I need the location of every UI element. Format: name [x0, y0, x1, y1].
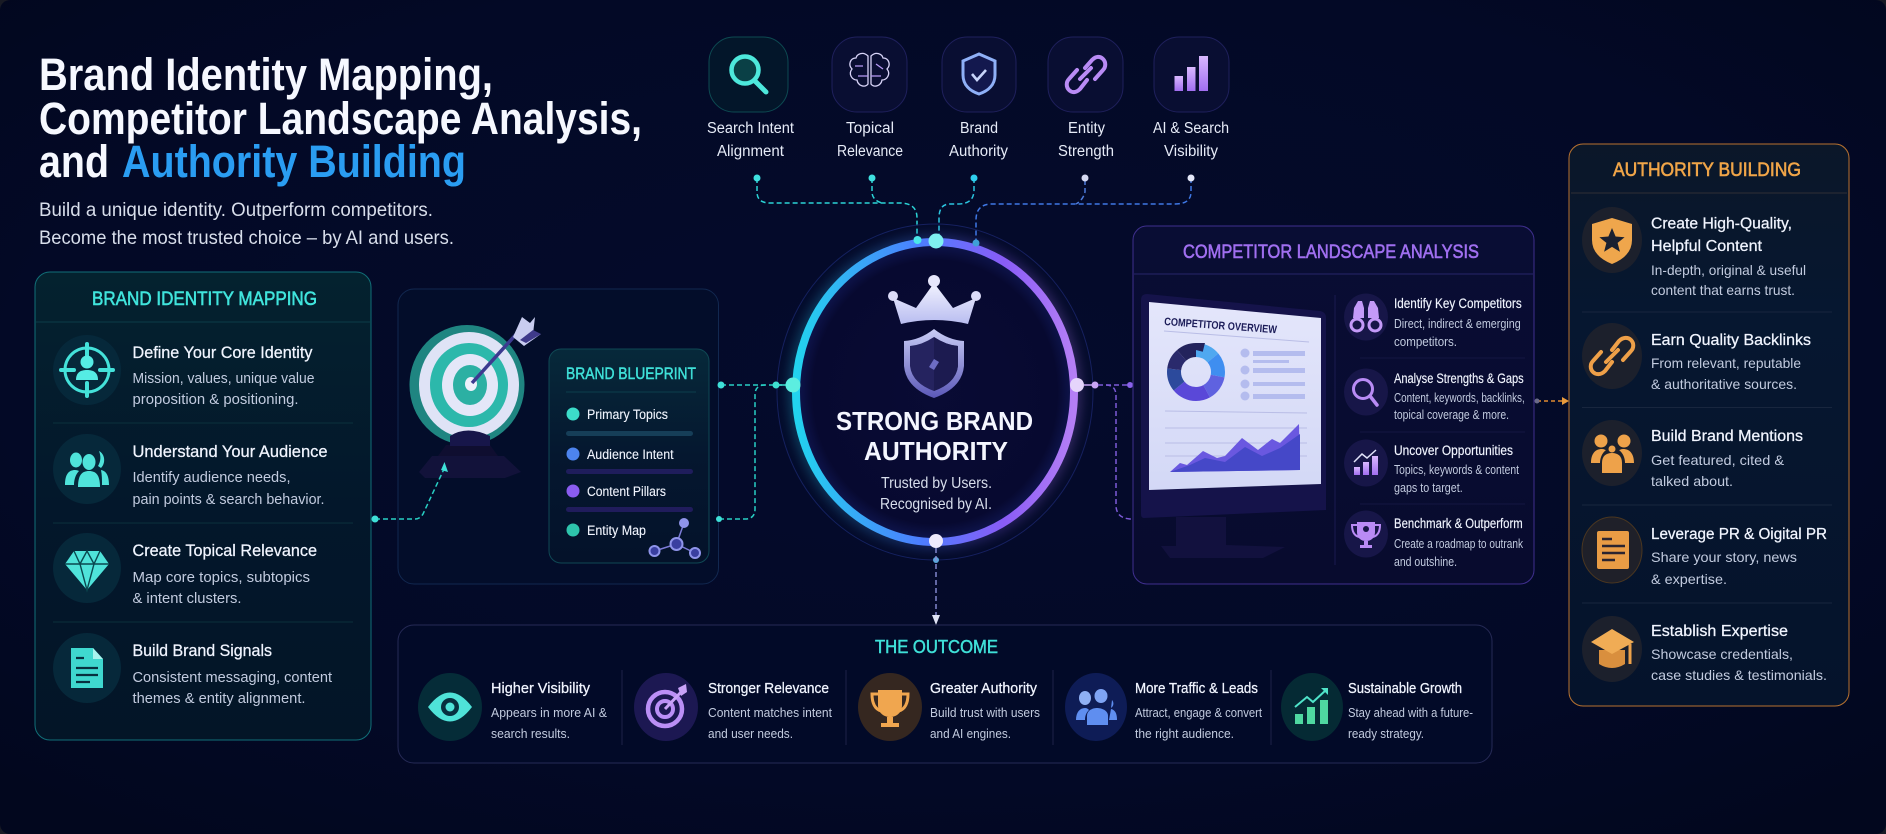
panel: brand identity mapping	[35, 272, 371, 740]
heading: competitor landscape analysis: COMPETITOR LANDSCAPE ANALYSIS	[1183, 241, 1479, 263]
item: stronger relevance	[634, 673, 832, 741]
item: create high-quality helpful content: In-depth, original & useful	[1651, 262, 1806, 278]
item: sustainable growth	[1281, 673, 1473, 741]
item: establish expertise: Establish Expertise	[1651, 623, 1788, 640]
item: uncover opportunities: Uncover Opportunities	[1394, 443, 1513, 458]
pillar: AI and search visibility	[1153, 37, 1229, 160]
item: understand your audience	[53, 434, 328, 508]
item: leverage PR and digital PR: & expertise.	[1651, 571, 1727, 587]
subtitle	[39, 199, 454, 249]
panel: competitor landscape analysis	[1133, 226, 1534, 584]
pillar: brand authority	[942, 37, 1016, 160]
item: create topical relevance	[53, 533, 317, 607]
item: leverage PR and digital PR: Leverage PR & Oigital PR	[1651, 526, 1827, 543]
item: more traffic and leads: More Traffic & Leads	[1135, 681, 1258, 697]
title: Authority Building	[122, 136, 466, 187]
item: analyse strengths and gaps: Content, keywords, backlinks,	[1394, 391, 1525, 405]
item: establish expertise: case studies & testimonials.	[1651, 667, 1827, 683]
item: establish expertise: Showcase credentials,	[1651, 646, 1793, 662]
pillar: AI and search visibility: Visibility	[1164, 143, 1218, 160]
item: stronger relevance: and user needs.	[708, 726, 793, 741]
item: build brand signals: Build Brand Signals	[132, 642, 272, 660]
item: define your core identity	[53, 335, 314, 408]
donut chart	[1174, 350, 1218, 394]
item: build brand mentions: Build Brand Mentions	[1651, 428, 1803, 445]
connector: competitor to authority	[1534, 397, 1569, 405]
item: higher visibility: Appears in more AI &	[491, 705, 607, 720]
heading: brand identity mapping: BRAND IDENTITY MAPPING	[92, 288, 317, 310]
card: brand blueprint: Content Pillars	[587, 484, 666, 499]
item: leverage PR and digital PR: Share your story, news	[1651, 549, 1797, 565]
item: build brand mentions	[1582, 420, 1803, 489]
card: brand blueprint: Entity Map	[587, 523, 646, 538]
pillar: brand authority: Authority	[949, 143, 1008, 160]
item: establish expertise	[1582, 616, 1827, 683]
card: brand blueprint: Primary Topics	[587, 407, 668, 422]
panel: brand blueprint and target	[398, 289, 718, 584]
item: understand your audience: Understand Your Audience	[132, 443, 328, 461]
panel: authority building	[1569, 144, 1849, 706]
item: create topical relevance: & intent clusters.	[132, 591, 242, 607]
item: greater authority: and AI engines.	[930, 726, 1011, 741]
heading: authority building: AUTHORITY BUILDING	[1613, 160, 1801, 181]
title: and	[39, 136, 109, 187]
panel: the outcome	[398, 625, 1492, 763]
top pillar icons row	[707, 37, 1229, 160]
pillar: search intent alignment: Alignment	[717, 143, 785, 160]
pillar: search intent alignment	[707, 37, 795, 160]
item: identify key competitors: Direct, indirect & emerging	[1394, 317, 1521, 331]
heading: the outcome: THE OUTCOME	[875, 637, 998, 657]
item: create topical relevance: Map core topics, subtopics	[132, 570, 310, 586]
item: build brand mentions: Get featured, cited &	[1651, 452, 1785, 468]
icon: shield	[904, 329, 964, 398]
item: stronger relevance: Content matches intent	[708, 705, 832, 720]
item: earn quality backlinks	[1582, 323, 1811, 392]
item: analyse strengths and gaps: Analyse Strengths & Gaps	[1394, 371, 1524, 386]
item: more traffic and leads: the right audience.	[1135, 726, 1234, 741]
title: Brand Identity Mapping,	[39, 49, 493, 100]
item: benchmark and outperform: and outshine.	[1394, 555, 1457, 569]
item: analyse strengths and gaps: topical coverage & more.	[1394, 408, 1509, 422]
chart: monitor competitor overview	[1141, 294, 1326, 558]
text: strong brand authority: Recognised by AI.	[880, 496, 992, 513]
item: higher visibility: search results.	[491, 726, 570, 741]
title	[39, 49, 642, 187]
item: higher visibility	[418, 673, 607, 741]
icon: target with arrow	[410, 317, 541, 478]
pillar: entity strength: Entity	[1068, 120, 1105, 137]
text: strong brand authority: STRONG BRAND	[836, 406, 1033, 436]
card: brand blueprint	[549, 349, 709, 563]
item: analyse strengths and gaps	[1344, 368, 1525, 422]
text: strong brand authority: Trusted by Users.	[881, 475, 992, 492]
chart: monitor competitor overview: COMPETITOR OVERVIEW	[1164, 316, 1278, 336]
subtitle: Become the most trusted choice – by AI and users.	[39, 227, 454, 249]
item: create high-quality helpful content: Create High-Quality,	[1651, 216, 1792, 232]
item: stronger relevance: Stronger Relevance	[708, 681, 829, 697]
text: strong brand authority	[836, 406, 1033, 513]
item: create high-quality helpful content: content that earns trust.	[1651, 282, 1795, 298]
item: understand your audience: pain points & search behavior.	[132, 492, 324, 508]
pillar: brand authority: Brand	[960, 120, 998, 137]
item: create high-quality helpful content	[1582, 207, 1806, 298]
item: build brand signals: themes & entity alignment.	[132, 691, 306, 707]
pillar: entity strength	[1048, 37, 1123, 160]
centre: strong brand authority	[772, 224, 1098, 563]
item: uncover opportunities: gaps to target.	[1394, 481, 1463, 495]
heading: brand blueprint: BRAND BLUEPRINT	[566, 364, 696, 383]
item: benchmark and outperform: Benchmark & Outperform	[1394, 516, 1523, 531]
card: brand blueprint: Audience Intent	[587, 447, 674, 462]
pillar: search intent alignment: Search Intent	[707, 120, 795, 137]
item: earn quality backlinks: Earn Quality Backlinks	[1651, 332, 1811, 349]
icon: crown	[888, 275, 981, 324]
title: Competitor Landscape Analysis,	[39, 93, 642, 144]
item: higher visibility: Higher Visibility	[491, 681, 591, 697]
item: benchmark and outperform	[1344, 510, 1524, 569]
pillar: topical relevance: Relevance	[837, 143, 903, 160]
item: identify key competitors: competitors.	[1394, 335, 1457, 349]
item: sustainable growth: ready strategy.	[1348, 726, 1424, 741]
item: uncover opportunities	[1344, 440, 1519, 495]
item: create high-quality helpful content: Helpful Content	[1651, 238, 1763, 255]
pillar: entity strength: Strength	[1058, 143, 1114, 160]
item: identify key competitors: Identify Key Competitors	[1394, 296, 1522, 311]
item: understand your audience: Identify audience needs,	[132, 470, 290, 486]
item: leverage PR and digital PR	[1582, 517, 1827, 587]
item: greater authority	[858, 673, 1040, 741]
connectors: pillars to core	[754, 174, 1194, 243]
subtitle: Build a unique identity. Outperform competitors.	[39, 199, 433, 221]
item: earn quality backlinks: & authoritative sources.	[1651, 376, 1797, 392]
connectors: core to competitor	[1098, 382, 1163, 519]
item: benchmark and outperform: Create a roadmap to outrank	[1394, 537, 1524, 551]
item: earn quality backlinks: From relevant, reputable	[1651, 355, 1801, 371]
item: build brand signals	[53, 633, 332, 707]
item: sustainable growth: Stay ahead with a future-	[1348, 705, 1473, 720]
icon: entity graph	[650, 518, 700, 558]
item: define your core identity: proposition & positioning.	[132, 392, 298, 408]
pillar: topical relevance	[832, 37, 907, 160]
pillar: topical relevance: Topical	[846, 120, 894, 137]
item: define your core identity: Define Your Core Identity	[132, 344, 313, 362]
legend list	[1240, 348, 1305, 400]
text: strong brand authority: AUTHORITY	[864, 436, 1008, 466]
item: uncover opportunities: Topics, keywords & content	[1394, 463, 1519, 477]
connector: core to outcome	[932, 548, 940, 625]
area chart	[1170, 424, 1300, 472]
item: greater authority: Build trust with users	[930, 705, 1040, 720]
item: identify key competitors	[1344, 294, 1522, 349]
item: more traffic and leads: Attract, engage & convert	[1135, 705, 1262, 720]
item: greater authority: Greater Authority	[930, 681, 1038, 697]
item: define your core identity: Mission, values, unique value	[132, 371, 314, 387]
pillar: AI and search visibility: AI & Search	[1153, 120, 1229, 137]
item: build brand signals: Consistent messaging, content	[132, 670, 332, 686]
item: more traffic and leads	[1065, 673, 1262, 741]
connectors: blueprint links	[372, 382, 793, 522]
item: create topical relevance: Create Topical Relevance	[132, 542, 317, 560]
item: build brand mentions: talked about.	[1651, 473, 1733, 489]
item: sustainable growth: Sustainable Growth	[1348, 681, 1462, 697]
ring nodes	[772, 234, 1098, 563]
